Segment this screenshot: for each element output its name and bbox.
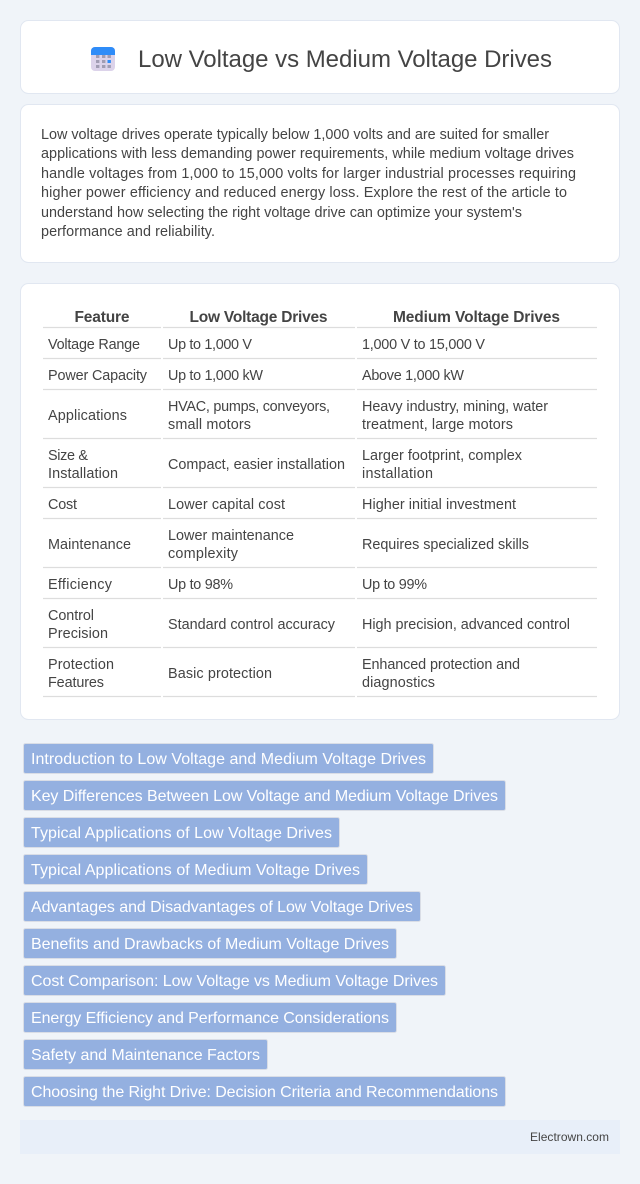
toc item 8 (24, 1002, 396, 1032)
row: efficiency: Efficiency (48, 577, 113, 593)
row: size and installation: Larger footprint, complex (362, 448, 523, 464)
table header row (74, 309, 560, 326)
toc item 10 (24, 1076, 506, 1106)
text block: introduction paragraph: higher power efficiency and reduced energy loss. Explore the rest of the article to (41, 185, 567, 201)
row: power capacity: Power Capacity (48, 368, 148, 384)
icon: calendar (91, 47, 115, 71)
row: control precision: Precision (48, 626, 108, 642)
toc item 3 (24, 818, 340, 848)
table header row: Feature (74, 309, 130, 326)
toc item 5: Advantages and Disadvantages of Low Voltage Drives (31, 899, 413, 916)
text block: introduction paragraph: applications with less demanding power requirements, while medium voltage drives (41, 146, 574, 162)
row: control precision (48, 608, 570, 642)
row: size and installation (48, 448, 523, 482)
row: cost (48, 497, 516, 513)
row: applications: Heavy industry, mining, water (362, 399, 548, 415)
toc item 4: Typical Applications of Medium Voltage Drives (31, 862, 360, 879)
table header row: Low Voltage Drives (190, 309, 328, 326)
toc item 5 (24, 892, 420, 922)
toc item 7: Cost Comparison: Low Voltage vs Medium Voltage Drives (31, 973, 438, 990)
toc item 8: Energy Efficiency and Performance Considerations (31, 1010, 389, 1027)
row: power capacity: Above 1,000 kW (362, 368, 464, 384)
row: applications: treatment, large motors (362, 417, 513, 433)
row: maintenance: Lower maintenance (168, 528, 294, 544)
toc item 3: Typical Applications of Low Voltage Drives (31, 825, 332, 842)
toc item 9: Safety and Maintenance Factors (31, 1047, 260, 1064)
row: control precision: Standard control accuracy (168, 617, 336, 633)
footer (20, 1120, 620, 1154)
row: protection features: Features (48, 675, 104, 691)
toc item 9 (24, 1040, 268, 1070)
row: voltage range: 1,000 V to 15,000 V (362, 337, 485, 353)
row: efficiency: Up to 98% (168, 577, 233, 593)
panel: introduction (20, 104, 620, 262)
row: cost: Lower capital cost (168, 497, 285, 513)
row: size and installation: Compact, easier installation (168, 457, 345, 473)
row: voltage range: Voltage Range (48, 337, 140, 353)
row: efficiency (48, 577, 427, 593)
row: applications: HVAC, pumps, conveyors, (168, 399, 330, 415)
table header row: Medium Voltage Drives (393, 309, 560, 326)
text block: introduction paragraph: performance and reliability. (41, 224, 215, 240)
row: size and installation: installation (362, 466, 433, 482)
toc item 6: Benefits and Drawbacks of Medium Voltage Drives (31, 936, 389, 953)
row: cost: Cost (48, 497, 77, 513)
row: voltage range (48, 337, 485, 353)
toc item 1 (24, 744, 434, 774)
row: maintenance: Maintenance (48, 537, 131, 553)
toc item 1: Introduction to Low Voltage and Medium Voltage Drives (31, 751, 426, 768)
toc item 6 (24, 928, 396, 958)
footer credit: Electrown.com (530, 1130, 609, 1144)
table of contents (24, 744, 506, 1106)
row: efficiency: Up to 99% (362, 577, 427, 593)
row: applications: small motors (168, 417, 251, 433)
row: protection features: Basic protection (168, 666, 272, 682)
row: power capacity: Up to 1,000 kW (168, 368, 263, 384)
toc item 2: Key Differences Between Low Voltage and Medium Voltage Drives (31, 788, 498, 805)
row: protection features: Enhanced protection and (362, 657, 520, 673)
row: maintenance: complexity (168, 546, 239, 562)
row: applications (48, 399, 548, 433)
toc item 2 (24, 780, 506, 810)
row: protection features: diagnostics (362, 675, 435, 691)
row: voltage range: Up to 1,000 V (168, 337, 252, 353)
text block: introduction paragraph (41, 127, 576, 240)
row: maintenance: Requires specialized skills (362, 537, 529, 553)
row: protection features (48, 657, 520, 691)
text block: introduction paragraph: understand how selecting the right voltage drive can optimize your system's (41, 205, 522, 221)
panel: comparison table (20, 284, 620, 720)
text block: introduction paragraph: Low voltage drives operate typically below 1,000 volts and are suited for smaller (41, 127, 549, 143)
row: power capacity (48, 368, 464, 384)
row: control precision: High precision, advanced control (362, 617, 570, 633)
toc item 4 (24, 854, 368, 884)
row: protection features: Protection (48, 657, 114, 673)
panel: header (20, 20, 620, 94)
row: size and installation: Installation (48, 466, 118, 482)
row: applications: Applications (48, 408, 127, 424)
toc item 10: Choosing the Right Drive: Decision Criteria and Recommendations (31, 1084, 498, 1101)
title: Low Voltage vs Medium Voltage Drives (138, 46, 552, 73)
row: size and installation: Size & (48, 448, 88, 464)
toc item 7 (24, 966, 446, 996)
text block: introduction paragraph: handle voltages from 1,000 to 15,000 volts for larger industrial processes requiring (41, 166, 576, 182)
row: control precision: Control (48, 608, 94, 624)
row: maintenance (48, 528, 529, 562)
row: cost: Higher initial investment (362, 497, 516, 513)
